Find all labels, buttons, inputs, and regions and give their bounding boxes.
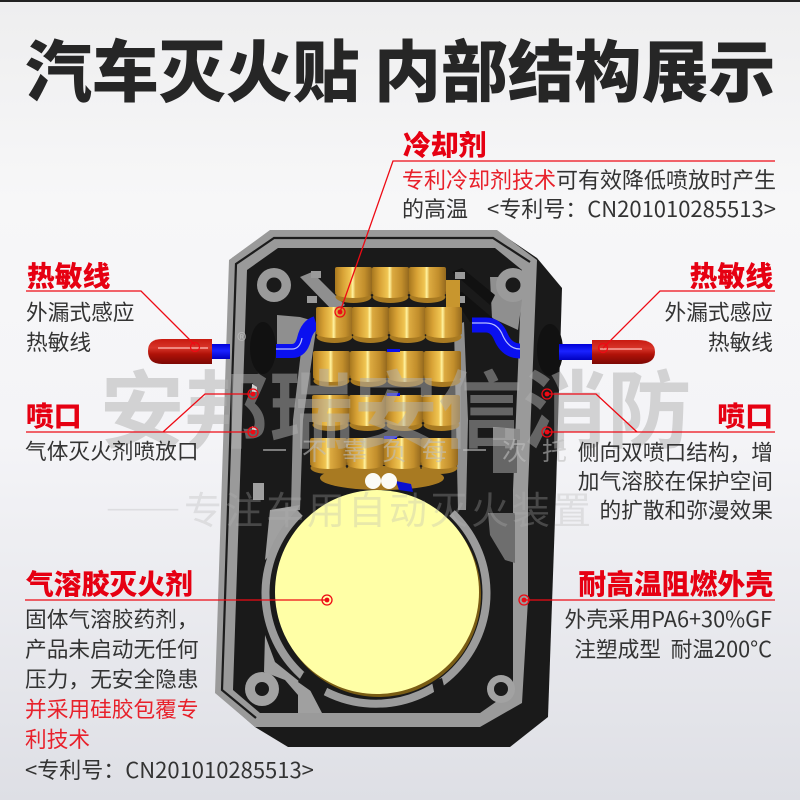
text: left thermal wire description: 外漏式感应	[26, 296, 134, 327]
watermark: ——专注车用自动灭火装置	[105, 480, 594, 535]
text: left nozzle description: 气体灭火剂喷放口	[25, 435, 199, 466]
blue thermal wire inside	[276, 323, 520, 351]
text: coolant description	[402, 163, 776, 224]
aerosol chamber ring	[266, 513, 487, 704]
outer black body	[216, 231, 562, 747]
black clips with grey tabs	[307, 268, 495, 322]
aerosol agent disc	[275, 490, 481, 697]
heading: right thermal wire: 热敏线	[690, 255, 773, 295]
text: aerosol description: 利技术	[25, 723, 90, 754]
title: 内部结构展示	[374, 19, 775, 116]
inner grey ribs and walls	[253, 272, 522, 713]
text: right nozzle description: 加气溶胶在保护空间	[578, 465, 773, 496]
watermark: 一不辜负每一次托	[262, 432, 582, 468]
text: shell description	[565, 603, 772, 664]
text: right thermal wire description	[665, 296, 773, 357]
title: 汽车灭火贴	[25, 19, 359, 116]
text: right nozzle description: 侧向双喷口结构，增	[578, 436, 773, 467]
text: aerosol description: 产品未启动无任何	[25, 633, 199, 664]
white balls and blue wire end	[365, 473, 413, 492]
right sensor wire and cap	[537, 324, 655, 376]
left sensor wire and cap	[148, 322, 276, 374]
nozzle tabs	[252, 384, 257, 430]
text: left thermal wire description: 热敏线	[26, 326, 91, 357]
text: aerosol description: 固体气溶胶药剂，	[25, 603, 199, 634]
text: shell description: 外壳采用PA6+30%GF	[565, 603, 772, 634]
text: coolant description: 的高温 <专利号：CN201010285513>	[402, 192, 776, 224]
heading: left thermal wire: 热敏线	[27, 255, 110, 295]
heading: coolant: 冷却剂	[403, 124, 486, 164]
text: aerosol description: <专利号：CN201010285513>	[25, 753, 314, 785]
text: coolant description: 专利冷却剂技术可有效降低喷放时产生	[402, 163, 776, 195]
watermark: ®	[237, 325, 246, 354]
grey housing rim	[215, 230, 537, 727]
text: left thermal wire description	[26, 296, 134, 357]
text: aerosol description: 压力，无安全隐患	[25, 663, 199, 694]
text: right thermal wire description: 外漏式感应	[665, 296, 773, 327]
watermark: 安邦瑞安信消防	[100, 344, 692, 466]
text: right nozzle description	[578, 436, 773, 525]
text: shell description: 注塑成型 耐温200°C	[574, 633, 772, 664]
title	[25, 19, 775, 116]
text: aerosol description: 并采用硅胶包覆专	[25, 693, 199, 724]
heading: aerosol agent: 气溶胶灭火剂	[26, 563, 193, 603]
text: right thermal wire description: 热敏线	[708, 326, 773, 357]
heading: right nozzle: 喷口	[717, 395, 773, 435]
text: right nozzle description: 的扩散和弥漫效果	[599, 494, 773, 525]
screw bosses	[245, 268, 530, 706]
coolant cylinders	[310, 267, 462, 490]
heading: shell: 耐高温阻燃外壳	[578, 563, 773, 603]
text: aerosol description	[25, 603, 314, 785]
heading: left nozzle: 喷口	[26, 395, 82, 435]
